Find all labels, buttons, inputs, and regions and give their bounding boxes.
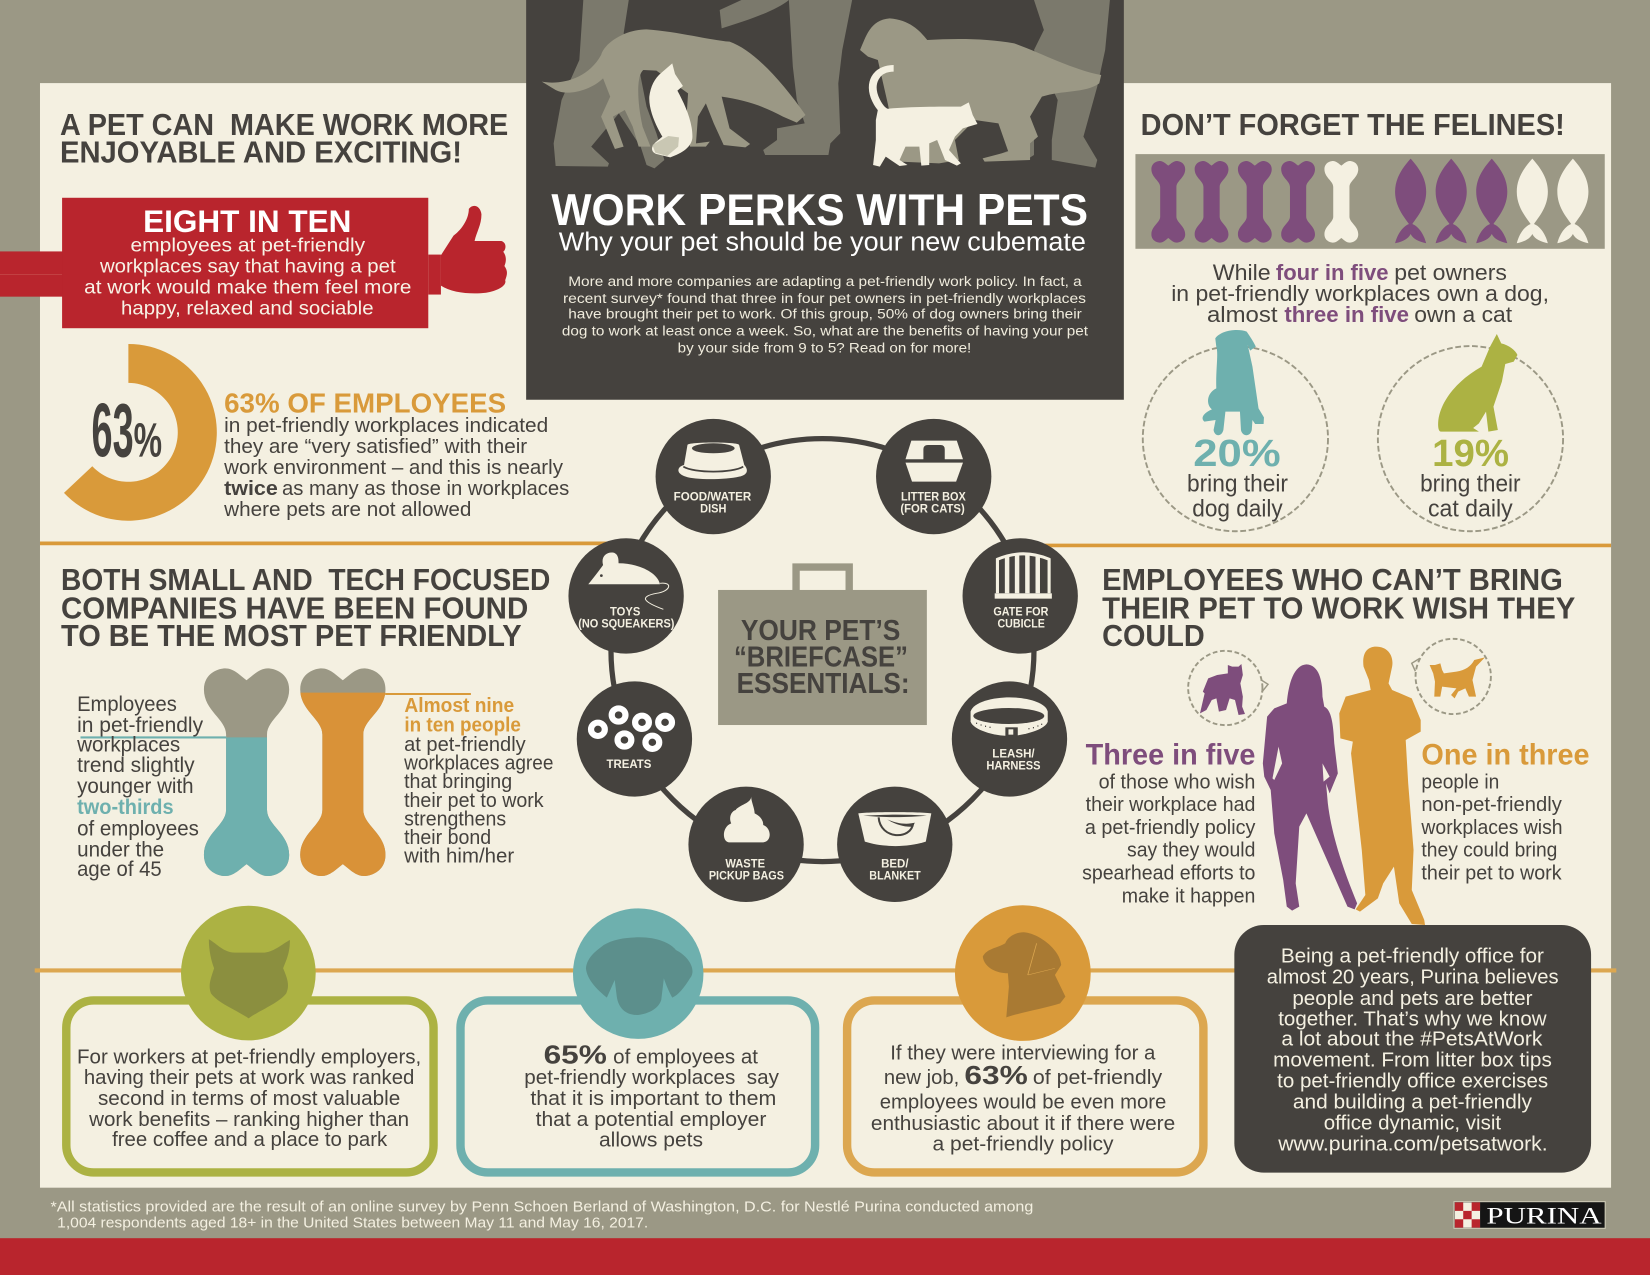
item: leash/harness [952, 681, 1067, 797]
icon: cat seated [1438, 334, 1517, 432]
card text: a pet-friendly policy [933, 1133, 1114, 1156]
card text: that it is important to them [530, 1087, 776, 1110]
card text [871, 1041, 1175, 1156]
callout text: eight in ten: employees at pet-friendly [130, 234, 365, 256]
illustration: pets and owners silhouettes [542, 0, 1110, 168]
text: dog and cat ownership: While [1213, 260, 1271, 285]
stat: 20 percent bring dog daily: bring their [1187, 470, 1288, 497]
card text: of employees at [613, 1045, 758, 1068]
card text: free coffee and a place to park [112, 1128, 388, 1151]
text: dog and cat ownership: four in five [1276, 260, 1389, 285]
text: three in five: a pet-friendly policy [1085, 816, 1256, 839]
subtitle: Why your pet should be your new cubemate [559, 226, 1086, 256]
card text: new job, [884, 1066, 959, 1089]
text: three in five: say they would [1127, 839, 1255, 862]
callout text: eight in ten [84, 203, 411, 320]
chart: teal bone two-thirds [81, 668, 289, 876]
icon: briefcase [718, 567, 927, 725]
text: employees younger: younger with [77, 775, 194, 798]
logo: purina [1454, 1202, 1605, 1229]
text: dog and cat ownership [1171, 260, 1549, 327]
intro paragraph: have brought their pet to work. Of this group, 50% of dog owners bring their [568, 307, 1082, 323]
text: three in five: spearhead efforts to [1082, 861, 1255, 884]
heading: most pet friendly: COMPANIES HAVE BEEN FOUND [61, 591, 528, 625]
card text: employees would be even more [880, 1090, 1166, 1113]
text: one in three [1420, 738, 1590, 884]
text: three in five: Three in five [1086, 738, 1255, 771]
icon: dog head badge [573, 908, 703, 1039]
text: 63 percent of employees [223, 387, 569, 521]
icon: thumbs up hand [441, 206, 507, 293]
diagram: briefcase essentials ring [568, 419, 1078, 902]
callout: purina pet-friendly office: www.purina.com/petsatwork. [1277, 1133, 1548, 1156]
footnote: 1,004 respondents aged 18+ in the United States between May 11 and May 16, 2017. [57, 1216, 648, 1232]
thought bubble: cat [1412, 639, 1491, 714]
bottom red band [0, 1238, 1650, 1275]
item: leash/harness: LEASH/ [992, 746, 1035, 760]
text: 63 percent of employees: they are “very satisfied” with their [224, 435, 527, 458]
chart: 63 percent donut: % [134, 414, 162, 468]
text: almost nine in ten: workplaces agree [403, 752, 554, 774]
text: 63 percent of employees: where pets are not allowed [223, 498, 471, 521]
text: employees younger: of employees [77, 817, 199, 840]
callout: purina pet-friendly office: office dynamic, visit [1324, 1111, 1501, 1134]
text: 63 percent of employees: 63% OF EMPLOYEES [224, 387, 506, 418]
text: employees younger: under the [77, 839, 164, 862]
heading: most pet friendly [61, 563, 550, 653]
title text: WORK PERKS WITH PETS [551, 186, 1088, 235]
item: food/water dish: FOOD/WATER [674, 490, 751, 504]
item: bed/blanket: BLANKET [869, 868, 921, 882]
item: toys: TOYS [610, 605, 640, 619]
heading: most pet friendly: TO BE THE MOST PET FRIENDLY [61, 619, 522, 653]
card text: work benefits – ranking higher than [88, 1108, 409, 1131]
icon: dog profile badge [955, 905, 1091, 1041]
card: second most valuable benefit [66, 906, 434, 1172]
item: leash/harness: HARNESS [986, 758, 1041, 772]
text: dog and cat ownership: pet owners [1394, 260, 1507, 285]
text: almost nine in ten: their pet to work [404, 790, 545, 812]
heading: enjoyable and exciting: A PET CAN MAKE WORK MORE [60, 108, 508, 142]
text: one in three: their pet to work [1421, 861, 1562, 884]
text: 63 percent of employees: as many as those in workplaces [282, 477, 569, 500]
intro paragraph: dog to work at least once a week. So, what are the benefits of having your pet [562, 324, 1088, 340]
callout: purina pet-friendly office: movement. From litter box tips [1273, 1049, 1552, 1072]
card text: 65% [544, 1039, 607, 1069]
text: almost nine in ten: in ten people [404, 715, 521, 737]
callout text: eight in ten: at work would make them feel more [84, 277, 411, 299]
heading: enjoyable and exciting: ENJOYABLE AND EXCITING! [60, 136, 462, 170]
callout text: eight in ten: EIGHT IN TEN [143, 203, 351, 239]
silhouette: woman [1263, 664, 1357, 911]
text: one in three: non-pet-friendly [1421, 793, 1563, 816]
icon: dog seated [1203, 330, 1264, 435]
chart: 63 percent donut: 63 [92, 389, 134, 474]
item: waste pickup bags: PICKUP BAGS [709, 868, 784, 882]
stat: 19 percent bring cat daily: cat daily [1428, 496, 1514, 523]
heading: most pet friendly: BOTH SMALL AND TECH FOCUSED [61, 563, 550, 597]
section: don't forget the felines [1135, 108, 1605, 531]
footnote: *All statistics provided are the result of an online survey by Penn Schoen Berland of Washington, D.C. for Nestlé Purina conducted among [51, 1200, 1033, 1216]
heading: felines: DON’T FORGET THE FELINES! [1141, 108, 1565, 142]
text: employees younger [76, 693, 204, 881]
stat: 20 percent bring dog daily: dog daily [1192, 496, 1284, 523]
text: almost nine in ten: Almost nine [404, 695, 514, 717]
item: litter box: (FOR CATS) [900, 501, 965, 515]
silhouette: man [1339, 647, 1425, 925]
text: three in five [1082, 738, 1256, 908]
text: employees younger: workplaces [76, 733, 180, 756]
item: litter box: LITTER BOX [901, 490, 966, 504]
text: almost nine in ten [403, 695, 554, 868]
callout: purina pet-friendly office: and building a pet-friendly [1293, 1090, 1533, 1113]
intro paragraph [562, 274, 1088, 356]
intro paragraph: More and more companies are adapting a pet-friendly work policy. In fact, a [568, 274, 1082, 290]
callout: purina pet-friendly office [1234, 925, 1591, 1173]
card text: enthusiastic about it if there were [871, 1112, 1175, 1135]
text: one in three: people in [1421, 770, 1499, 793]
item: food/water dish [656, 419, 771, 534]
item: toys [568, 538, 684, 654]
text: one in three: One in three [1421, 738, 1590, 771]
text: dog and cat ownership: almost [1207, 302, 1277, 327]
text: employees younger: trend slightly [77, 754, 195, 777]
item: gate for cubicle [963, 538, 1078, 654]
text: almost nine in ten: at pet-friendly [404, 734, 526, 756]
item: toys: (NO SQUEAKERS) [578, 616, 674, 630]
heading: wish they could [1102, 563, 1575, 653]
text: three in five: their workplace had [1086, 793, 1255, 816]
text: almost nine in ten: their bond [404, 827, 491, 849]
text: one in three: they could bring [1421, 839, 1557, 862]
heading: wish they could: EMPLOYEES WHO CAN’T BRING [1102, 563, 1563, 597]
text: employees younger: Employees [77, 693, 177, 716]
card text: allows pets [599, 1129, 703, 1152]
item: bed/blanket: BED/ [881, 856, 909, 870]
briefcase heading [734, 615, 910, 700]
stat: 19 percent bring cat daily [1378, 334, 1563, 531]
card text [524, 1039, 780, 1152]
text: dog and cat ownership: three in five [1284, 302, 1409, 327]
card text: If they were interviewing for a [890, 1041, 1156, 1064]
card text: For workers at pet-friendly employers, [77, 1045, 421, 1068]
heading: wish they could: THEIR PET TO WORK WISH THEY [1102, 591, 1575, 625]
callout: purina pet-friendly office: Being a pet-friendly office for [1281, 945, 1544, 968]
text: employees younger: in pet-friendly [77, 714, 204, 737]
item: food/water dish: DISH [700, 501, 726, 515]
callout text: eight in ten: workplaces say that having a pet [99, 255, 396, 277]
heading: wish they could: COULD [1102, 619, 1205, 653]
briefcase heading: ESSENTIALS: [737, 668, 910, 700]
red callout with thumbs-up arm [0, 198, 507, 328]
card: 65 percent [460, 908, 815, 1172]
heading: enjoyable and exciting [60, 108, 508, 170]
chart: 63 percent donut [64, 344, 217, 521]
text: one in three: workplaces wish [1420, 816, 1563, 839]
card text: that a potential employer [536, 1108, 767, 1131]
card text [77, 1045, 421, 1151]
card text: second in terms of most valuable [98, 1087, 400, 1110]
briefcase heading: YOUR PET’S [741, 615, 900, 647]
callout text: eight in ten: happy, relaxed and sociable [121, 298, 374, 320]
callout: purina pet-friendly office: people and pets are better [1292, 987, 1533, 1010]
item: bed/blanket [837, 787, 952, 902]
text: three in five: make it happen [1122, 885, 1255, 908]
stat: 20 percent bring dog daily: 20% [1193, 433, 1281, 475]
section: small and tech focused companies [61, 563, 554, 881]
text: 63 percent of employees: work environment – and this is nearly [223, 456, 564, 479]
card text: of pet-friendly [1033, 1066, 1163, 1089]
callout: purina pet-friendly office: to pet-friendly office exercises [1277, 1070, 1548, 1093]
card text: having their pets at work was ranked [84, 1066, 414, 1089]
text: three in five: of those who wish [1099, 770, 1255, 793]
text: dog and cat ownership: in pet-friendly workplaces own a dog, [1171, 281, 1549, 306]
intro paragraph: by your side from 9 to 5? Read on for more! [678, 340, 971, 356]
briefcase heading: “BRIEFCASE” [734, 642, 908, 674]
callout: purina pet-friendly office: together. That’s why we know [1278, 1008, 1547, 1031]
item: gate for cubicle: GATE FOR [993, 605, 1049, 619]
stat: 20 percent bring dog daily [1143, 330, 1328, 531]
intro paragraph: recent survey* found that three in four pet owners in pet-friendly workplaces [563, 291, 1086, 307]
stat: 19 percent bring cat daily: bring their [1420, 470, 1521, 497]
text: dog and cat ownership: own a cat [1414, 302, 1512, 327]
item: waste pickup bags [688, 787, 804, 902]
thought bubble: dog [1188, 651, 1268, 725]
text: almost nine in ten: strengthens [404, 808, 506, 830]
section: a pet can make work more enjoyable [0, 108, 569, 521]
title panel [526, 0, 1124, 400]
text: almost nine in ten: with him/her [403, 846, 514, 868]
item: gate for cubicle: CUBICLE [997, 616, 1045, 630]
item: treats: TREATS [607, 757, 651, 771]
item: waste pickup bags: WASTE [725, 856, 765, 870]
text: employees younger: age of 45 [77, 858, 162, 881]
callout: purina pet-friendly office: almost 20 years, Purina believes [1267, 965, 1559, 988]
stat: 19 percent bring cat daily: 19% [1432, 433, 1509, 475]
card text: pet-friendly workplaces say [524, 1066, 780, 1089]
section: employees who wish they could bring pets [1082, 563, 1590, 925]
card: 63 percent interviewing [847, 905, 1203, 1172]
item: litter box [876, 419, 991, 534]
callout: purina pet-friendly office: a lot about the #PetsAtWork [1281, 1028, 1543, 1051]
card text: 63% [964, 1060, 1028, 1090]
icon: cat head badge [181, 906, 316, 1040]
text: 63 percent of employees: twice [224, 477, 278, 500]
item: treats [577, 681, 692, 797]
logo: purina: PURINA [1486, 1203, 1602, 1229]
text: employees younger: two-thirds [77, 796, 174, 819]
pictogram: bones and fish ratio [1135, 154, 1605, 249]
chart: orange bone nine in ten [300, 668, 471, 876]
text: 63 percent of employees: in pet-friendly workplaces indicated [224, 414, 548, 437]
text: almost nine in ten: that bringing [404, 771, 512, 793]
footnote [51, 1200, 1033, 1232]
